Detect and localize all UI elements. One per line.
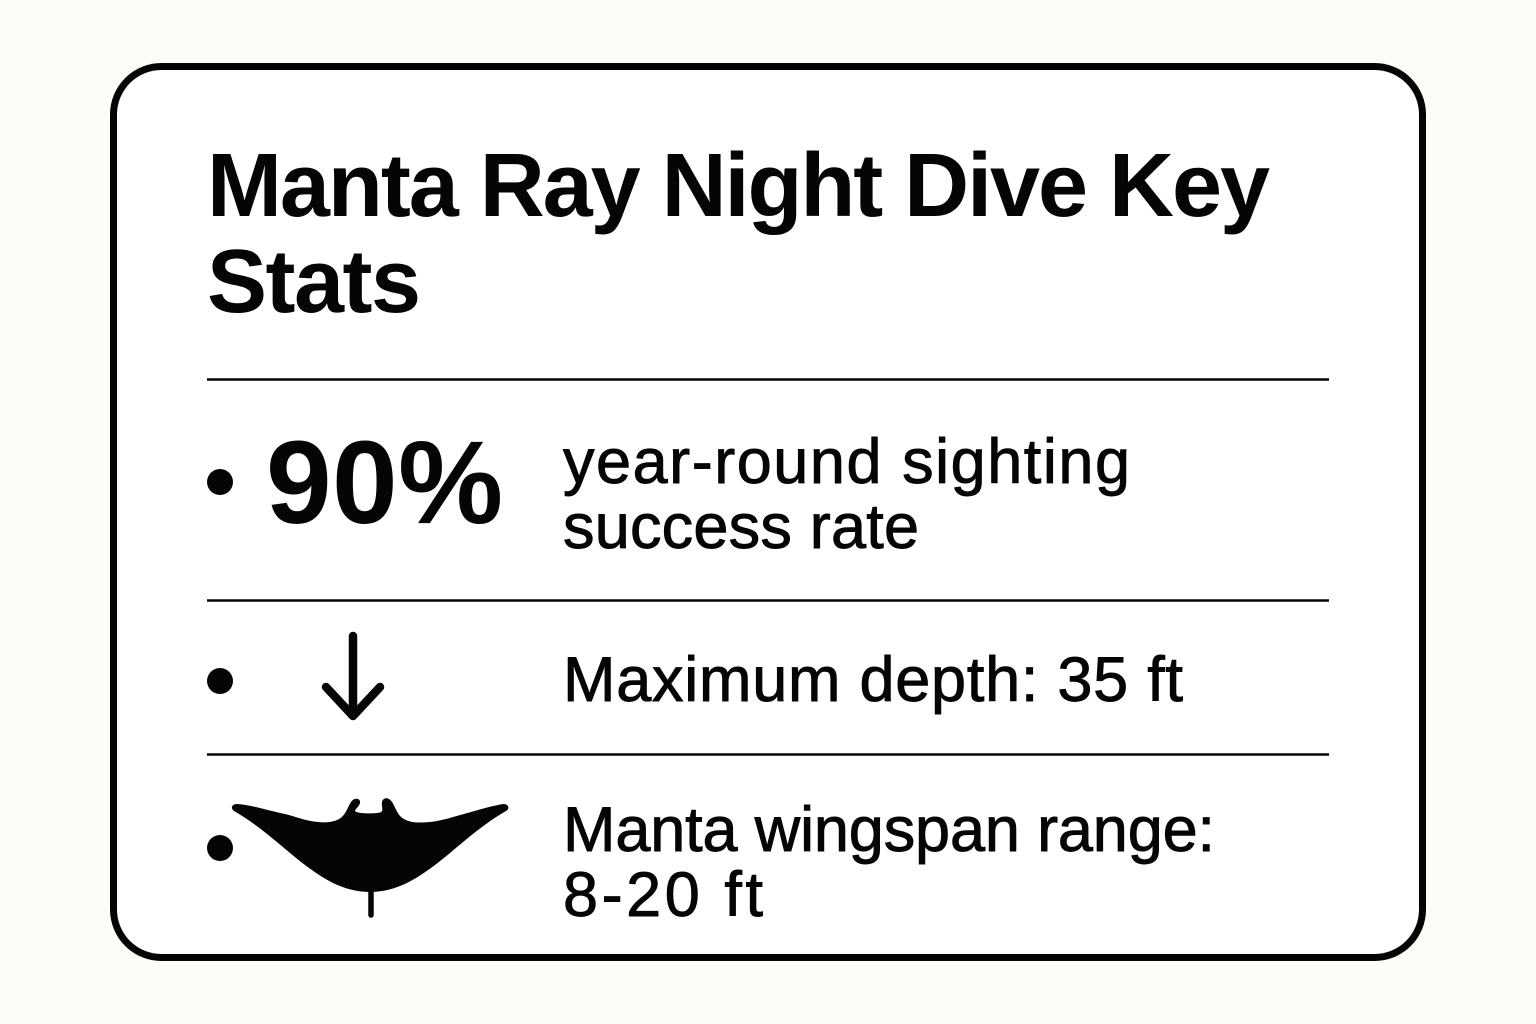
title: Stats	[207, 232, 421, 332]
panel: stats card	[114, 66, 1422, 958]
bullet	[207, 835, 233, 861]
title	[207, 136, 1270, 332]
icon: down arrow	[326, 636, 380, 716]
bullet	[207, 469, 233, 495]
stat row: sighting success	[207, 417, 1130, 562]
stat description: sighting	[563, 427, 1130, 562]
stat description: wingspan	[563, 795, 1215, 930]
stat description: wingspan: Manta wingspan range:	[563, 795, 1215, 865]
title: Manta Ray Night Dive Key	[207, 136, 1270, 236]
stat description: wingspan: 8-20 ft	[563, 860, 763, 930]
big number: 90%: 90%	[266, 417, 503, 549]
bullet	[207, 668, 233, 694]
stat description: sighting: year-round sighting	[563, 427, 1130, 497]
stat description: depth: Maximum depth: 35 ft	[563, 645, 1183, 715]
icon: manta ray	[232, 798, 508, 915]
stat row: maximum depth	[207, 636, 1183, 716]
stat description: sighting: success rate	[563, 492, 919, 562]
stat row: wingspan	[207, 795, 1215, 930]
